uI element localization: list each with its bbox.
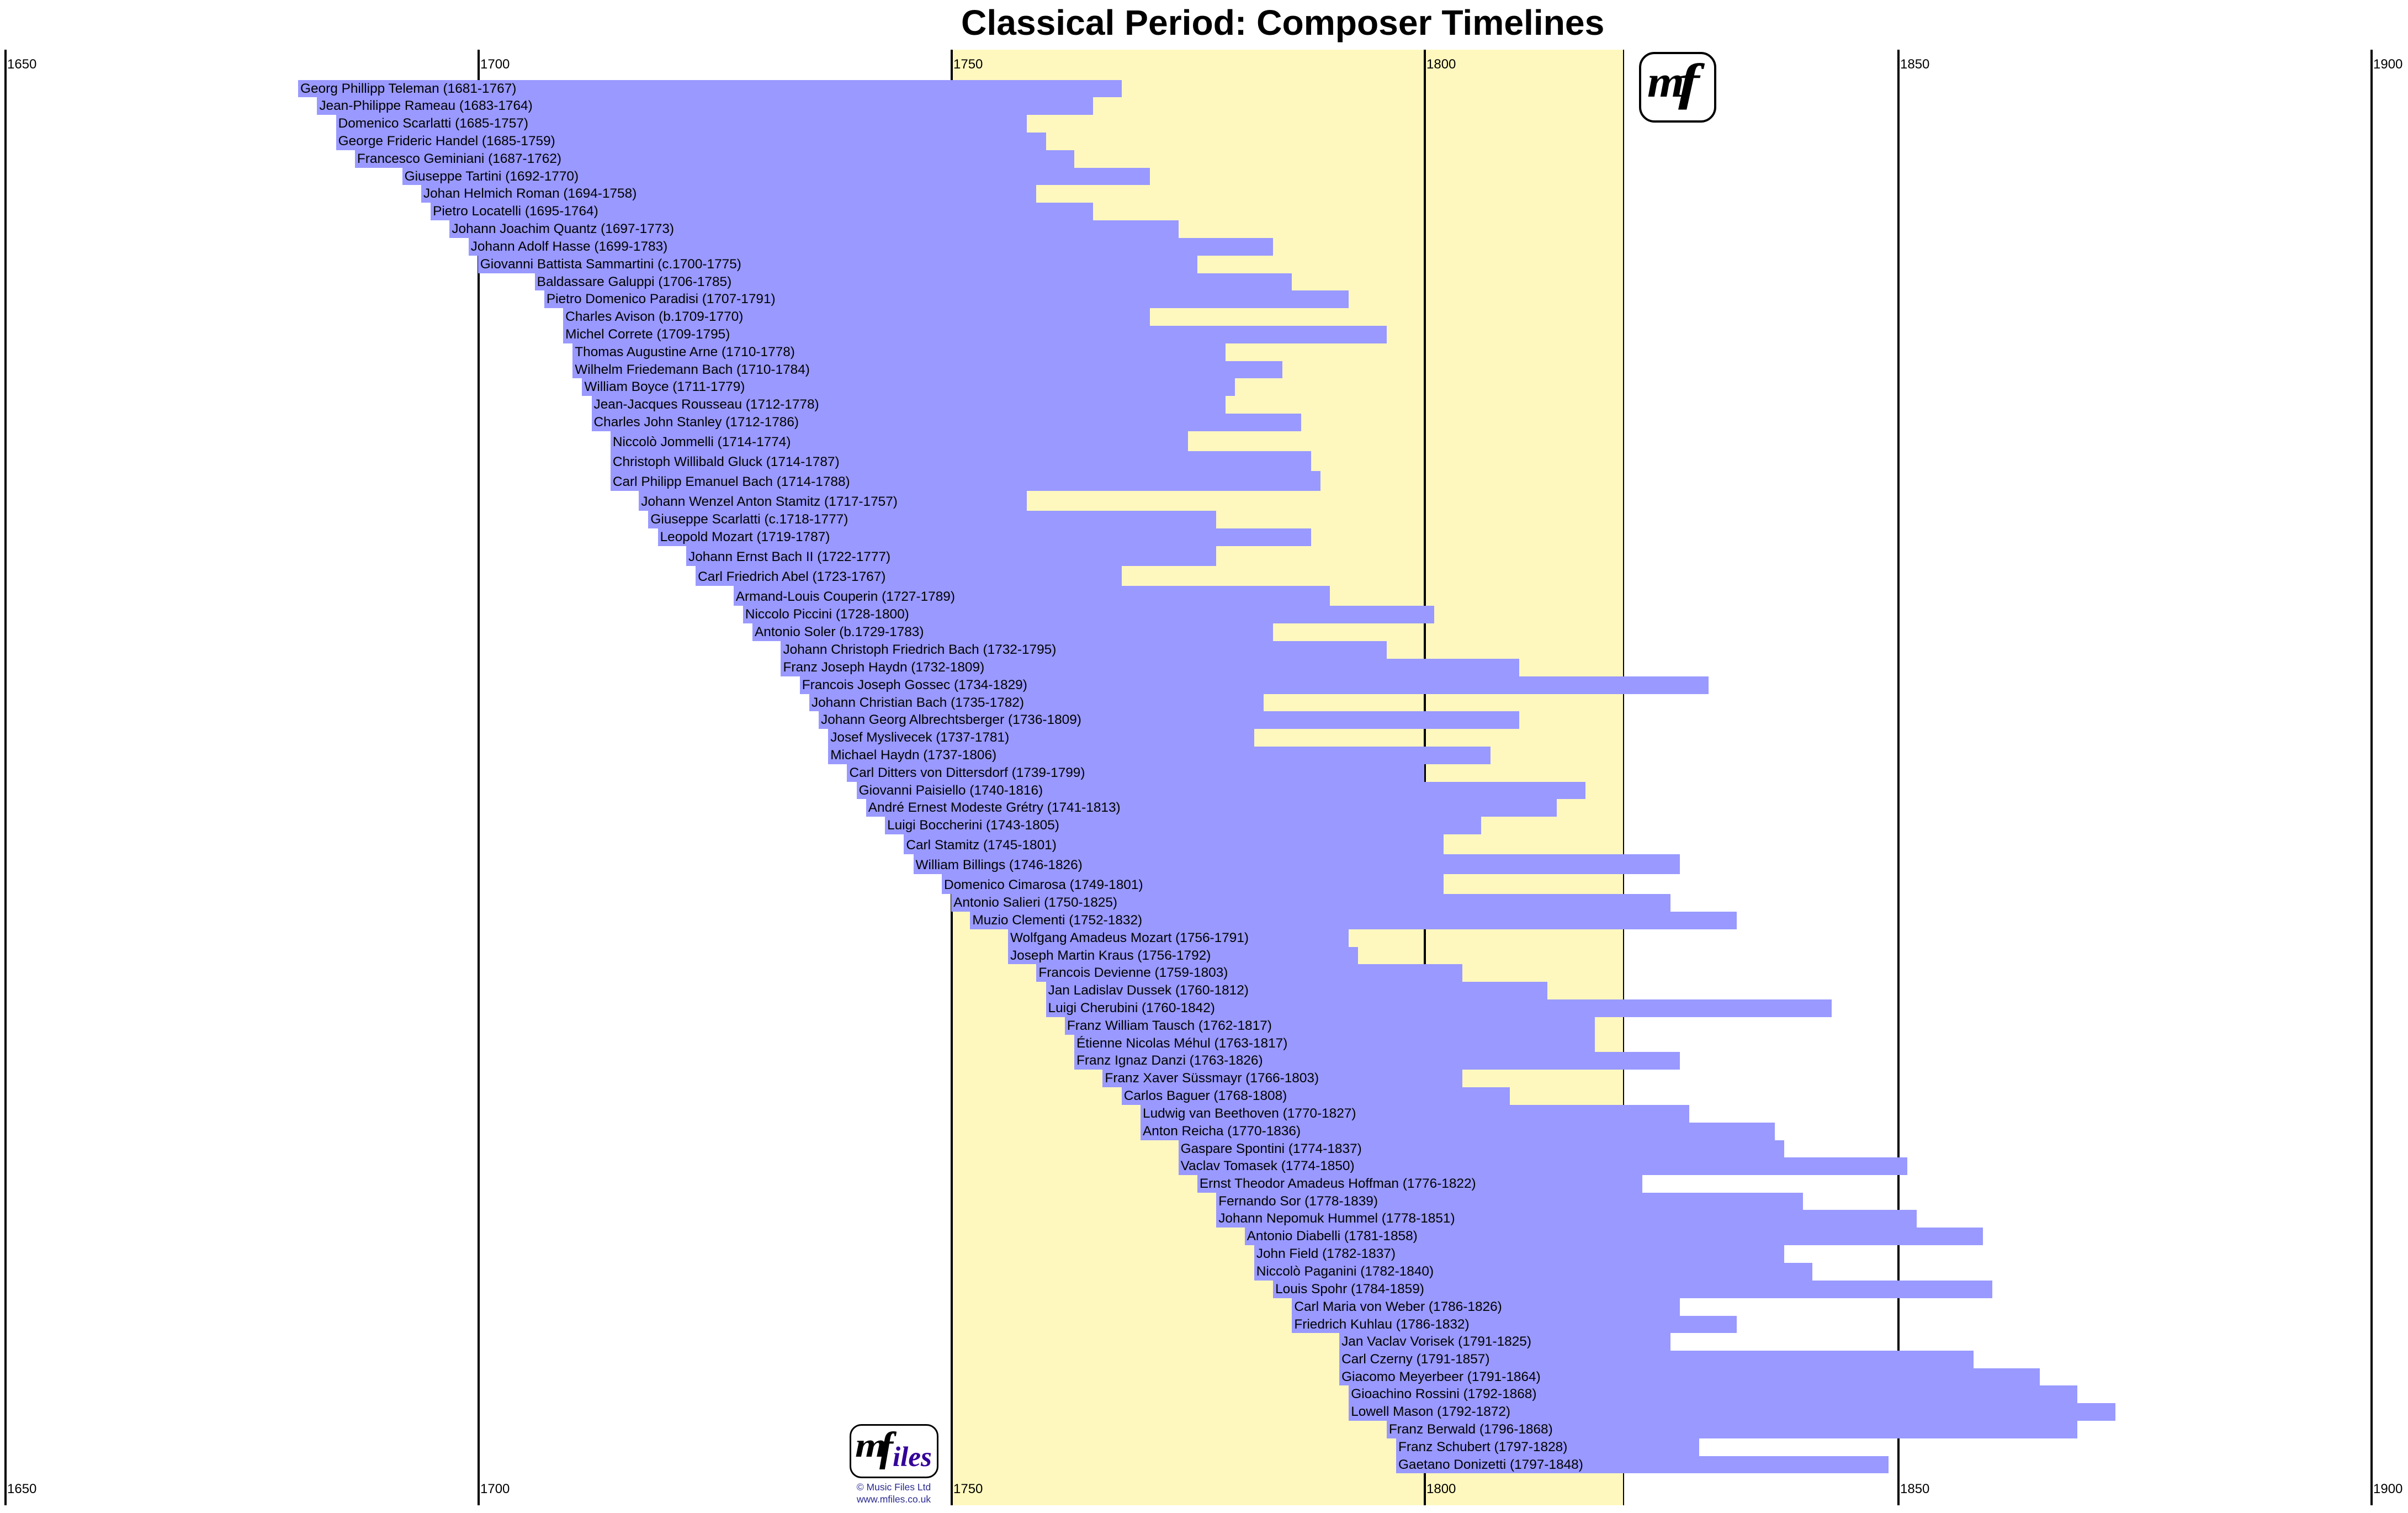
bar: Sor: Fernando Sor (1778-1839): [1218, 1194, 1378, 1209]
bar: Boccherini: Luigi Boccherini (1743-1805): [887, 818, 1059, 833]
bar: Dittersdorf: Carl Ditters von Dittersdorf (1739-1799): [849, 765, 1085, 780]
bar: Hummel: [1216, 1210, 1917, 1228]
bar: Mason: [1349, 1403, 2115, 1421]
bar: Paradisi: [544, 290, 1349, 308]
bar: Diabelli: [1245, 1228, 1983, 1245]
bar: Devienne: Francois Devienne (1759-1803): [1038, 965, 1228, 980]
bar: Spontini: [1179, 1140, 1784, 1157]
bar: Schubert: Franz Schubert (1797-1828): [1398, 1440, 1567, 1454]
bar: Myslivecek: Josef Myslivecek (1737-1781): [830, 730, 1009, 745]
bar: Sussmayr: Franz Xaver Süssmayr (1766-1803): [1105, 1071, 1319, 1086]
bar: Abel: Carl Friedrich Abel (1723-1767): [698, 569, 885, 584]
icon: mfiles logo bottom: iles: [893, 1442, 932, 1473]
bar: Domenico Scarlatti: [336, 115, 1027, 133]
bar: Gluck: Christoph Willibald Gluck (1714-1787): [613, 454, 840, 469]
bar: Devienne: [1036, 964, 1462, 982]
bar: Clementi: Muzio Clementi (1752-1832): [972, 913, 1142, 928]
bar: Field: [1254, 1245, 1784, 1263]
bar: J. E. Bach: [686, 546, 1216, 566]
bar: Berwald: Franz Berwald (1796-1868): [1389, 1422, 1553, 1437]
bar: Telemann: Georg Phillipp Teleman (1681-1767): [300, 81, 516, 96]
bottom axis label 1900: 1900: [2373, 1482, 2402, 1496]
bar: Couperin: [734, 586, 1330, 606]
bar: Mason: Lowell Mason (1792-1872): [1351, 1404, 1510, 1419]
bar: Baguer: Carlos Baguer (1768-1808): [1124, 1088, 1287, 1103]
bar: Avison: Charles Avison (b.1709-1770): [565, 309, 743, 324]
bar: Couperin: Armand-Louis Couperin (1727-1789): [736, 589, 955, 604]
bar: Donizetti: Gaetano Donizetti (1797-1848): [1398, 1457, 1583, 1472]
bar: Dussek: Jan Ladislav Dussek (1760-1812): [1048, 983, 1249, 998]
bar: J. C. Bach: Johann Christian Bach (1735-1782): [811, 695, 1024, 710]
bar: Geminiani: Francesco Geminiani (1687-1762): [357, 151, 561, 166]
icon: mf logo top: m: [1647, 57, 1684, 107]
bar: Reicha: [1141, 1123, 1775, 1140]
bar: Kraus: Joseph Martin Kraus (1756-1792): [1010, 948, 1211, 963]
bar: Kraus: [1008, 947, 1358, 964]
bar: Carl Stamitz: Carl Stamitz (1745-1801): [906, 838, 1057, 853]
bar: Rameau: Jean-Philippe Rameau (1683-1764): [319, 98, 533, 113]
bar: Berwald: [1387, 1421, 2077, 1438]
bar: Rossini: [1349, 1385, 2077, 1403]
bar: Jommelli: [611, 431, 1188, 451]
bar: Gluck: [611, 451, 1311, 471]
bar: Quantz: Johann Joachim Quantz (1697-1773): [452, 221, 674, 236]
year gridline 1750: [951, 50, 953, 1505]
bar: Locatelli: [431, 203, 1093, 220]
bar: Cimarosa: Domenico Cimarosa (1749-1801): [944, 877, 1143, 892]
bar: Sammartini: Giovanni Battista Sammartini (c.1700-1775): [480, 257, 741, 272]
bar: Giuseppe Scarlatti: [648, 511, 1216, 528]
year gridline 1900: [2370, 50, 2373, 1505]
bar: W. F. Bach: [572, 361, 1282, 378]
bar: Michael Haydn: [828, 747, 1491, 764]
bar: Salieri: Antonio Salieri (1750-1825): [953, 895, 1117, 910]
bar: Dittersdorf: [847, 764, 1424, 782]
bar: Handel: George Frideric Handel (1685-1759): [338, 134, 555, 149]
bar: Roman: Johan Helmich Roman (1694-1758): [423, 186, 637, 201]
bar: Soler: [752, 623, 1273, 641]
bar: Sor: [1216, 1193, 1803, 1210]
bar: Gossec: [800, 676, 1709, 694]
bar: Rameau: [317, 97, 1093, 115]
bar: Piccini: Niccolo Piccini (1728-1800): [745, 607, 909, 622]
bar: Tomasek: Vaclav Tomasek (1774-1850): [1181, 1158, 1355, 1173]
bar: Danzi: [1074, 1052, 1680, 1070]
bar: Beethoven: [1141, 1105, 1689, 1123]
bottom axis label 1750: 1750: [953, 1482, 983, 1496]
bar: Sammartini: [478, 256, 1197, 273]
icon: mfiles logo bottom: [850, 1424, 938, 1478]
bar: Galuppi: [535, 273, 1292, 290]
bar: Paisiello: Giovanni Paisiello (1740-1816): [859, 783, 1043, 798]
bar: Tomasek: [1179, 1157, 1907, 1175]
bar: Diabelli: Antonio Diabelli (1781-1858): [1247, 1229, 1418, 1244]
bar: Baguer: [1122, 1087, 1510, 1105]
bar: Paradisi: Pietro Domenico Paradisi (1707-1791): [547, 292, 776, 306]
bar: Field: John Field (1782-1837): [1256, 1246, 1396, 1261]
bar: Domenico Scarlatti: Domenico Scarlatti (1685-1757): [338, 116, 528, 131]
bar: Tausch: Franz William Tausch (1762-1817): [1067, 1018, 1272, 1033]
top axis label 1850: 1850: [1900, 57, 1929, 72]
highlighted band: Classical period 1750-1820: [951, 50, 1624, 1505]
bar: J. W. A. Stamitz: [639, 491, 1027, 511]
bar: Leopold Mozart: [658, 528, 1311, 546]
icon: mf logo top: [1639, 52, 1716, 123]
top axis label 1900: 1900: [2373, 57, 2402, 72]
bar: Vorisek: Jan Vaclav Vorisek (1791-1825): [1341, 1334, 1531, 1349]
bar: Telemann: [298, 80, 1122, 97]
bar: Spontini: Gaspare Spontini (1774-1837): [1181, 1141, 1362, 1156]
bar: Arne: [572, 343, 1226, 361]
bar: Stanley: [592, 414, 1301, 431]
bar: Cherubini: Luigi Cherubini (1760-1842): [1048, 1001, 1215, 1015]
bar: Clementi: [970, 912, 1737, 929]
bar: Sussmayr: [1102, 1070, 1462, 1087]
bar: Cimarosa: [942, 874, 1444, 894]
bar: Handel: [336, 133, 1046, 150]
bar: Carl Stamitz: [904, 834, 1444, 854]
bar: Abel: [696, 566, 1122, 586]
bar: Billings: William Billings (1746-1826): [916, 858, 1083, 872]
bar: J. C. F. Bach: Johann Christoph Friedrich Bach (1732-1795): [783, 642, 1056, 657]
bar: Hoffman: [1197, 1175, 1642, 1193]
bar: Kuhlau: Friedrich Kuhlau (1786-1832): [1294, 1317, 1470, 1332]
bar: Boyce: [582, 378, 1235, 396]
year gridline 1650: [4, 50, 7, 1505]
bar: Meyerbeer: [1339, 1368, 2040, 1385]
bar: Giuseppe Scarlatti: Giuseppe Scarlatti (c.1718-1777): [650, 512, 848, 527]
bar: Michael Haydn: Michael Haydn (1737-1806): [830, 748, 996, 763]
bar: C. P. E. Bach: Carl Philipp Emanuel Bach (1714-1788): [613, 474, 850, 489]
icon: mfiles logo bottom: m: [855, 1426, 887, 1464]
bar: Dussek: [1046, 982, 1547, 999]
bar: W. F. Bach: Wilhelm Friedemann Bach (1710-1784): [575, 362, 810, 377]
bar: Hummel: Johann Nepomuk Hummel (1778-1851): [1218, 1211, 1455, 1226]
bar: Paganini: [1254, 1263, 1812, 1281]
bar: Vorisek: [1339, 1333, 1670, 1351]
bar: Hasse: Johann Adolf Hasse (1699-1783): [471, 239, 667, 254]
title: Classical Period: Composer Timelines: [961, 3, 1604, 43]
bar: Joseph Haydn: [781, 659, 1519, 676]
bar: Albrechtsberger: [819, 711, 1519, 729]
bottom axis label 1700: 1700: [480, 1482, 510, 1496]
bar: Tausch: [1065, 1017, 1595, 1035]
bar: Beethoven: Ludwig van Beethoven (1770-1827): [1143, 1106, 1356, 1121]
year gridline 1700: [478, 50, 480, 1505]
bar: Tartini: [402, 168, 1150, 185]
bar: Geminiani: [355, 150, 1074, 168]
bar: J. W. A. Stamitz: Johann Wenzel Anton Stamitz (1717-1757): [641, 494, 898, 509]
bar: Galuppi: Baldassare Galuppi (1706-1785): [537, 274, 731, 289]
top axis label 1750: 1750: [953, 57, 983, 72]
bar: Stanley: Charles John Stanley (1712-1786): [594, 415, 799, 430]
bar: Hoffman: Ernst Theodor Amadeus Hoffman (1776-1822): [1200, 1176, 1476, 1191]
bar: Weber: Carl Maria von Weber (1786-1826): [1294, 1299, 1502, 1314]
bar: Jommelli: Niccolò Jommelli (1714-1774): [613, 435, 791, 449]
year gridline 1800: [1424, 50, 1426, 1505]
bar: Piccini: [743, 606, 1434, 623]
top axis label 1650: 1650: [7, 57, 36, 72]
bar: W. A. Mozart: Wolfgang Amadeus Mozart (1756-1791): [1010, 930, 1249, 945]
bar: Locatelli: Pietro Locatelli (1695-1764): [433, 204, 598, 219]
website note: www.mfiles.co.uk: [857, 1494, 931, 1505]
bottom axis label 1800: 1800: [1426, 1482, 1456, 1496]
copyright note: © Music Files Ltd: [857, 1482, 931, 1493]
bar: Correte: Michel Correte (1709-1795): [565, 327, 730, 342]
bar: Albrechtsberger: Johann Georg Albrechtsberger (1736-1809): [821, 712, 1081, 727]
bar: Reicha: Anton Reicha (1770-1836): [1143, 1124, 1301, 1139]
bar: Gretry: André Ernest Modeste Grétry (1741-1813): [868, 800, 1121, 815]
bar: Tartini: Giuseppe Tartini (1692-1770): [405, 169, 579, 184]
bar: Czerny: Carl Czerny (1791-1857): [1341, 1352, 1489, 1367]
bottom axis label 1850: 1850: [1900, 1482, 1929, 1496]
bar: J. C. Bach: [809, 694, 1264, 711]
top axis label 1700: 1700: [480, 57, 510, 72]
bar: Schubert: [1396, 1438, 1699, 1456]
bar: Joseph Haydn: Franz Joseph Haydn (1732-1809): [783, 660, 984, 675]
bar: C. P. E. Bach: [611, 471, 1320, 491]
bar: Paganini: Niccolò Paganini (1782-1840): [1256, 1264, 1434, 1279]
bar: Spohr: [1273, 1281, 1992, 1298]
bar: Mehul: Étienne Nicolas Méhul (1763-1817): [1076, 1036, 1287, 1051]
bar: Weber: [1292, 1298, 1680, 1316]
icon: mf logo top: f: [1678, 54, 1705, 110]
bar: Danzi: Franz Ignaz Danzi (1763-1826): [1076, 1053, 1263, 1068]
bar: Billings: [914, 854, 1680, 874]
bar: Boyce: William Boyce (1711-1779): [584, 379, 745, 394]
bar: Spohr: Louis Spohr (1784-1859): [1275, 1282, 1424, 1297]
bar: Leopold Mozart: Leopold Mozart (1719-1787): [660, 530, 830, 544]
bar: Rousseau: [592, 396, 1226, 414]
bar: Cherubini: [1046, 999, 1832, 1017]
bar: Rousseau: Jean-Jacques Rousseau (1712-1778): [594, 397, 819, 412]
bar: Czerny: [1339, 1351, 1974, 1368]
bar: Rossini: Gioachino Rossini (1792-1868): [1351, 1387, 1536, 1401]
top axis label 1800: 1800: [1426, 57, 1456, 72]
bar: Mehul: [1074, 1035, 1595, 1052]
bar: J. C. F. Bach: [781, 641, 1387, 659]
bar: Paisiello: [857, 782, 1585, 799]
bar: Quantz: [449, 220, 1179, 238]
bottom axis label 1650: 1650: [7, 1482, 36, 1496]
bar: Hasse: [469, 238, 1273, 256]
bar: Avison: [563, 308, 1150, 326]
bar: Kuhlau: [1292, 1316, 1737, 1333]
bar: Arne: Thomas Augustine Arne (1710-1778): [575, 345, 795, 359]
bar: Boccherini: [885, 817, 1481, 834]
bar: Correte: [563, 326, 1387, 343]
bar: Donizetti: [1396, 1456, 1889, 1473]
bar: Soler: Antonio Soler (b.1729-1783): [755, 625, 924, 639]
icon: mfiles logo bottom: f: [879, 1424, 897, 1470]
year gridline 1850: [1897, 50, 1900, 1505]
bar: Gretry: [866, 799, 1557, 817]
bar: Roman: [421, 185, 1036, 203]
bar: W. A. Mozart: [1008, 929, 1349, 947]
bar: Meyerbeer: Giacomo Meyerbeer (1791-1864): [1341, 1369, 1541, 1384]
bar: Gossec: Francois Joseph Gossec (1734-1829): [802, 678, 1027, 692]
bar: Salieri: [951, 894, 1670, 912]
bar: J. E. Bach: Johann Ernst Bach II (1722-1777): [688, 549, 890, 564]
bar: Myslivecek: [828, 729, 1254, 747]
